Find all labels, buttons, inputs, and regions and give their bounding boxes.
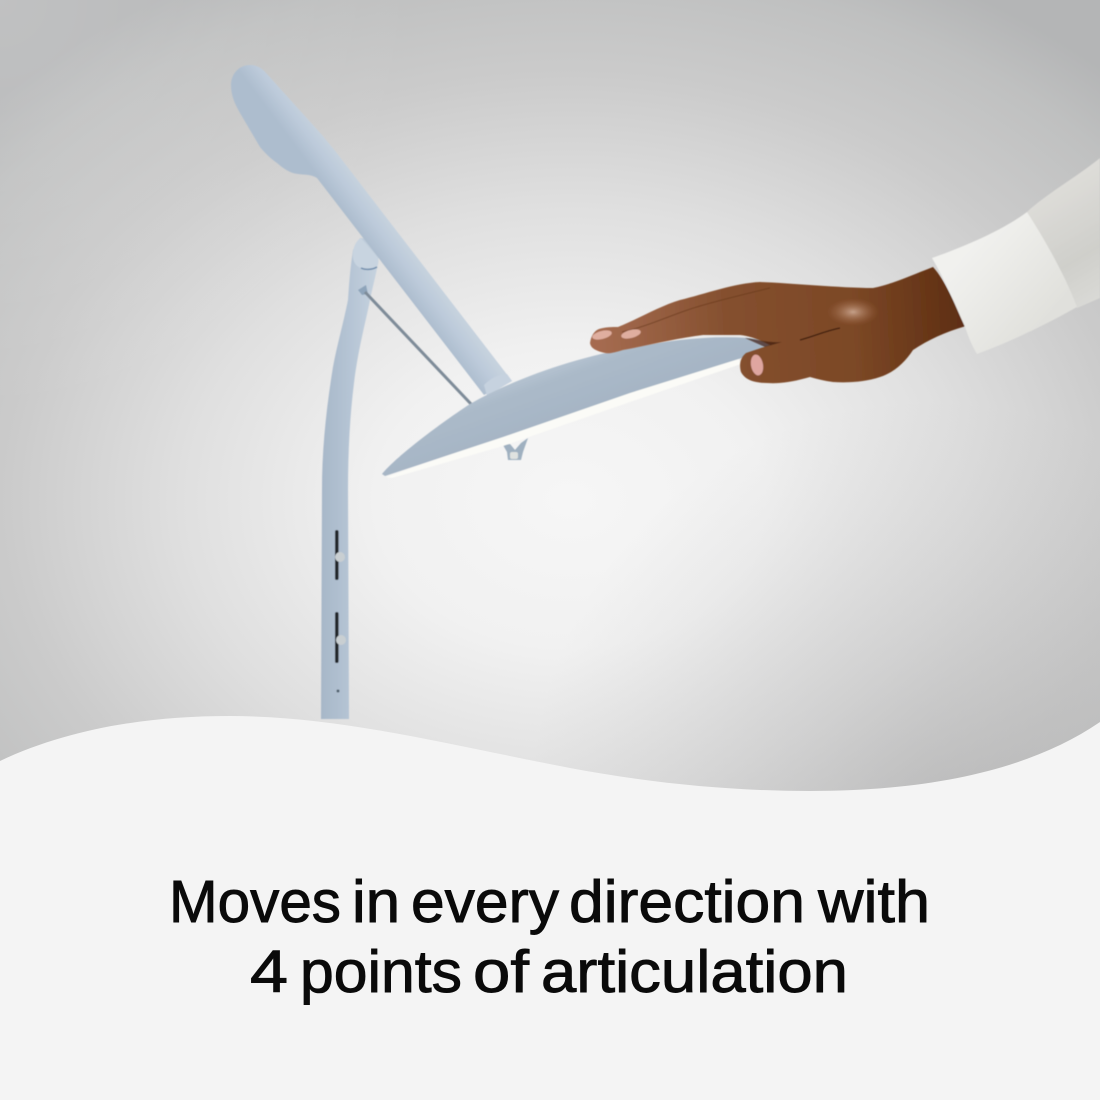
- hand shadow on disc: [745, 338, 782, 347]
- sleeve: [1027, 158, 1100, 308]
- knob 2: [336, 635, 346, 645]
- thumbnail: [749, 354, 765, 376]
- headline: [169, 869, 930, 1005]
- headline line 2: articulation: [541, 939, 848, 1005]
- headline line 2: 4: [250, 939, 288, 1005]
- arm to disc collar: [484, 374, 512, 396]
- headline line 1: with: [817, 869, 930, 935]
- pole joint: [353, 238, 378, 268]
- knob 1: [335, 552, 345, 562]
- pivot bracket: [358, 285, 368, 295]
- slot 2: [335, 612, 339, 663]
- lamp: [231, 65, 778, 719]
- thumb crease: [800, 328, 840, 340]
- headline line 1: every: [411, 869, 560, 935]
- disc light strip: [386, 357, 741, 478]
- shirt cuff: [932, 212, 1077, 354]
- lamp arm: [231, 65, 512, 395]
- fingernail index: [591, 329, 613, 341]
- knuckle highlight: [827, 298, 879, 326]
- joint collar: [361, 267, 377, 269]
- butterfly clip: [503, 438, 528, 460]
- headline line 1: [169, 869, 930, 935]
- fingernail middle: [620, 328, 642, 340]
- headline line 2: points: [300, 939, 462, 1005]
- slot 1: [335, 530, 339, 580]
- headline line 1: in: [352, 869, 400, 935]
- headline line 2: [250, 939, 848, 1005]
- hand: [590, 267, 966, 383]
- wave panel: [0, 716, 1100, 1100]
- pole screw: [336, 690, 340, 692]
- support rod: [365, 292, 471, 404]
- headline line 1: direction: [569, 869, 805, 935]
- lamp pole: [321, 238, 380, 719]
- lamp disc shade: [382, 337, 778, 476]
- headline line 2: of: [473, 939, 530, 1005]
- arm with hand and sleeve: [590, 158, 1100, 383]
- headline line 1: Moves: [169, 869, 341, 935]
- finger separation: [622, 288, 770, 332]
